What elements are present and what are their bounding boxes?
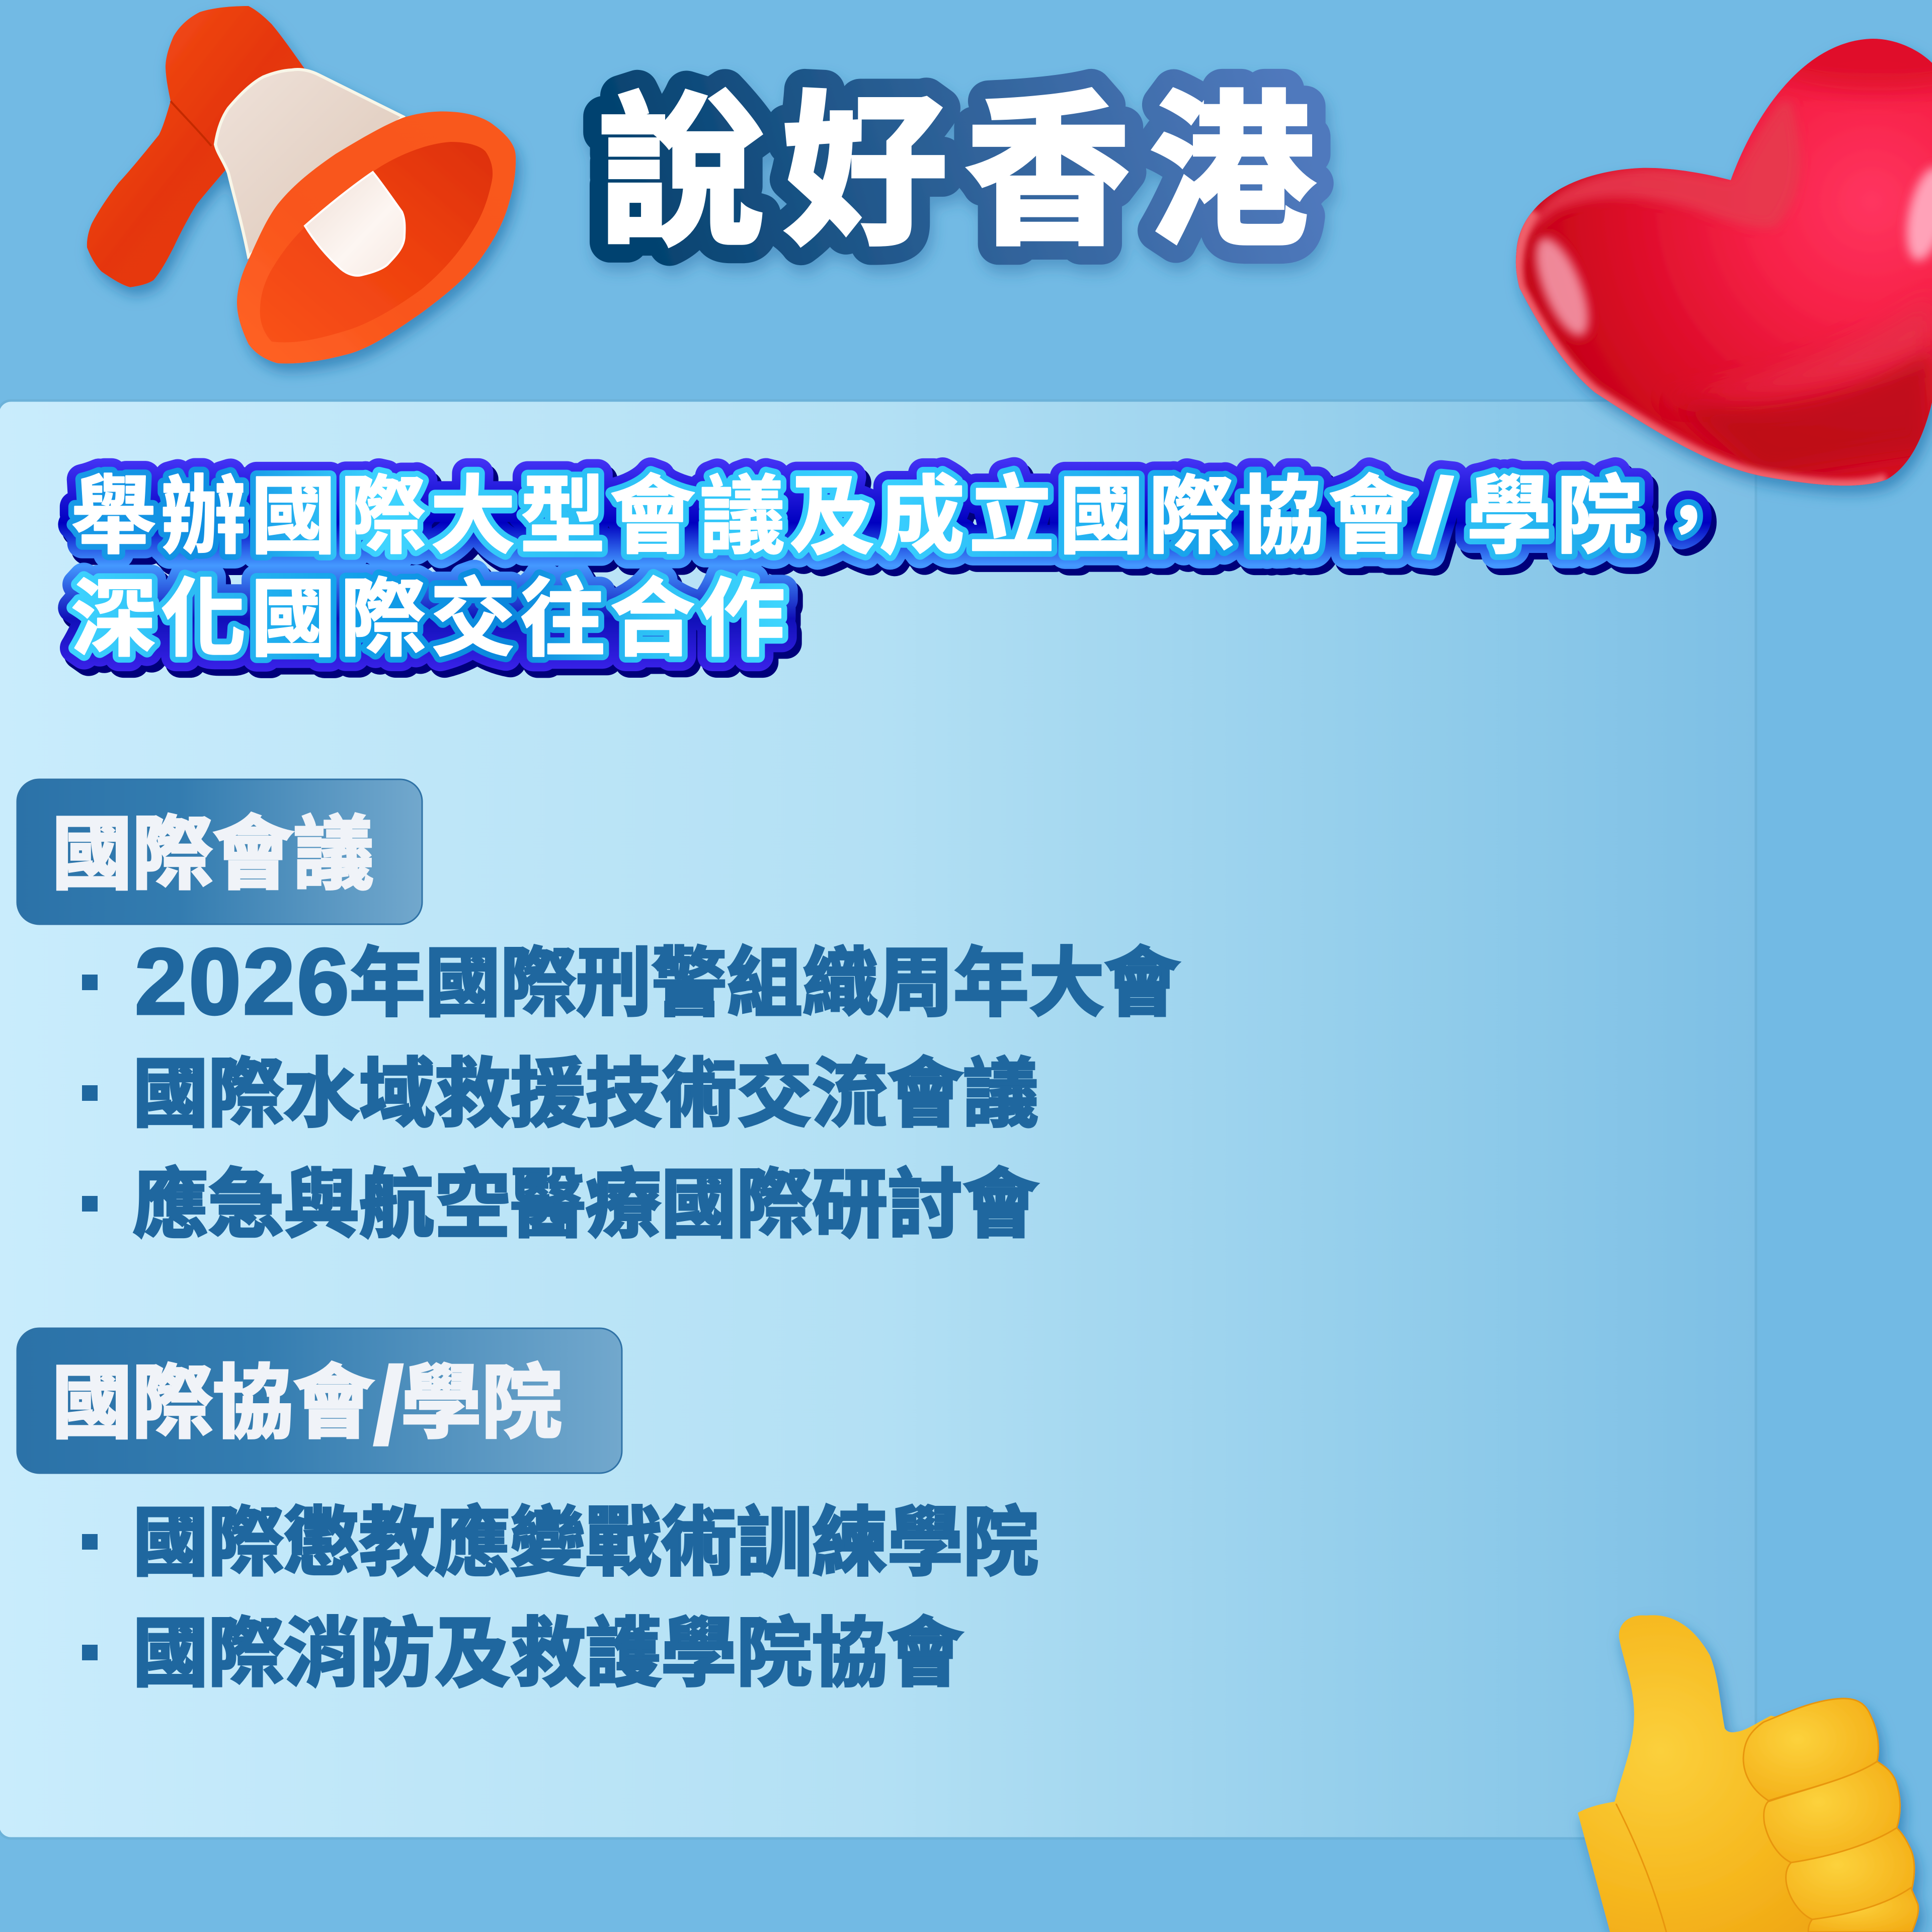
megaphone cone	[215, 69, 403, 257]
list item 2: 國際水域救援技術交流會議	[133, 1033, 1038, 1142]
title text: 說好香港	[599, 39, 1333, 277]
subtitle cyan outline: ，	[1650, 459, 1730, 569]
subtitle white text	[71, 447, 1730, 673]
list item 1: 2026	[135, 930, 351, 1034]
subtitle cyan outline: 學院	[1467, 447, 1646, 571]
hand	[1578, 1615, 1862, 1932]
list item 3: 應急與航空醫療國際研討會	[133, 1144, 1038, 1253]
title outline: 說好香港	[599, 39, 1333, 277]
heart lower light band	[1660, 297, 1932, 398]
subtitle cyan outline: /	[1414, 454, 1461, 577]
section: international associations	[17, 1328, 1038, 1702]
subtitle shadow layer: /	[1419, 460, 1465, 583]
subtitle	[71, 447, 1735, 679]
subtitle purple outline: /	[1414, 454, 1461, 577]
heart lower dark band	[1675, 342, 1932, 478]
subtitle cyan outline: 舉辦國際大型會議及成立國際協會	[71, 447, 1418, 571]
heart edge light	[1517, 211, 1887, 486]
subtitle white text: 學院	[1467, 447, 1646, 571]
subtitle white text: 舉辦國際大型會議及成立國際協會	[71, 447, 1418, 571]
finger 2	[1764, 1761, 1900, 1863]
icon: megaphone	[87, 6, 516, 364]
heart highlight right	[1899, 164, 1932, 264]
heading text: 國際會議: 國際會議	[52, 789, 374, 906]
icon: thumbs up	[1578, 1615, 1918, 1932]
finger 4	[1808, 1888, 1918, 1932]
megaphone handle crease	[171, 101, 211, 146]
subtitle white text: ，	[1650, 459, 1730, 569]
heading pill: 國際協會/學院	[17, 1328, 622, 1473]
subtitle shadow layer	[75, 453, 1735, 679]
list item 4: 國際懲教應變戰術訓練學院	[133, 1482, 1038, 1591]
finger 1	[1743, 1699, 1879, 1801]
list item 5: 國際消防及救護學院協會	[133, 1592, 963, 1702]
megaphone bell interior	[260, 142, 493, 342]
heart upper lobe top shade	[1785, 39, 1932, 101]
megaphone back and handle	[87, 6, 309, 287]
subtitle white text: 深化國際交往合作	[71, 549, 789, 673]
heading text: 國際協會/學院: 國際協會	[52, 1338, 374, 1455]
list item 1: 年國際刑警組織周年大會	[350, 922, 1180, 1031]
subtitle cyan outline	[71, 447, 1730, 673]
megaphone speaker	[305, 172, 405, 276]
subtitle purple outline: ，	[1650, 459, 1730, 569]
cuff line	[1616, 1804, 1666, 1932]
megaphone bell	[237, 112, 516, 364]
subtitle purple outline: 學院	[1467, 447, 1646, 571]
subtitle shadow layer: 學院	[1471, 453, 1651, 577]
subtitle shadow layer: 舉辦國際大型會議及成立國際協會	[75, 453, 1423, 577]
icon: heart	[1516, 20, 1932, 486]
panel: content card	[0, 400, 1756, 1838]
heading text: 國際協會/學院: 學院	[401, 1338, 562, 1455]
subtitle purple outline	[71, 447, 1730, 673]
subtitle purple outline: 深化國際交往合作	[71, 549, 789, 673]
heart highlight left	[1524, 230, 1600, 343]
subtitle shadow layer: ，	[1655, 465, 1735, 575]
section: international conferences	[17, 779, 1180, 1253]
heart upper left sheen	[1524, 101, 1800, 236]
title	[599, 39, 1333, 277]
heading pill: 國際會議	[17, 779, 422, 924]
heading text: 國際協會/學院: /	[373, 1345, 404, 1466]
subtitle cyan outline: 深化國際交往合作	[71, 549, 789, 673]
subtitle white text: /	[1414, 454, 1461, 577]
subtitle shadow layer: 深化國際交往合作	[75, 555, 794, 679]
subtitle purple outline: 舉辦國際大型會議及成立國際協會	[71, 447, 1418, 571]
finger 3	[1786, 1828, 1914, 1919]
